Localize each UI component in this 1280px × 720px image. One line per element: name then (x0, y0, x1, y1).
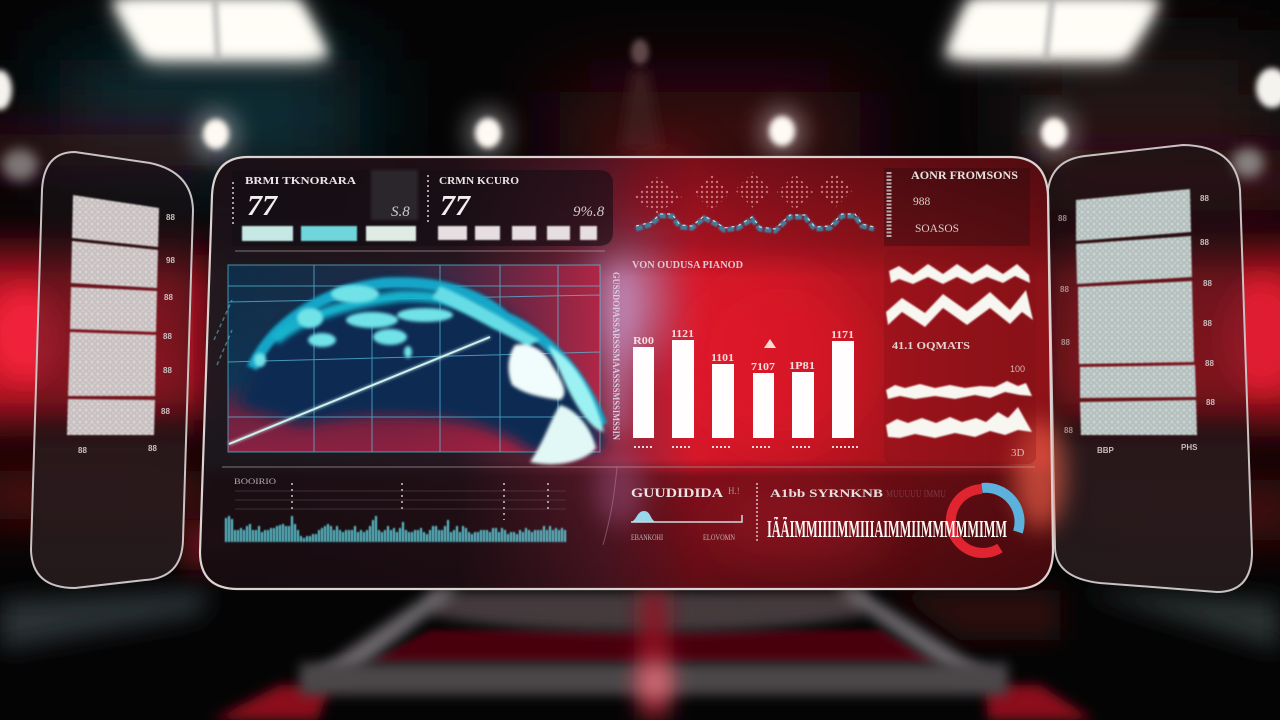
stacked bar blocks: left (67, 195, 159, 435)
zigzag charts (884, 250, 1036, 464)
bar value labels: 1P81 (789, 361, 815, 372)
dotted pattern strip (633, 172, 874, 231)
zigzag 4 (886, 407, 1032, 438)
right axis labels: PHS (1181, 443, 1198, 452)
trajectory line (229, 337, 490, 444)
mini chart: bottom centre (603, 467, 757, 545)
zigzag 1 (889, 264, 1030, 284)
right axis labels: BBP (1097, 446, 1115, 455)
right axis labels: 88 (1064, 426, 1073, 435)
panel: right side screen (1048, 145, 1252, 592)
summary label: SOASOS (915, 223, 959, 235)
bar value labels: R00 (633, 336, 654, 347)
right axis labels: 88 (1205, 359, 1214, 368)
left axis labels: 88 (163, 332, 172, 341)
bar value labels (633, 329, 854, 373)
bar chart heading: VON OUDUSA PIANOD (632, 260, 743, 271)
left axis labels: 88 (161, 407, 170, 416)
spectrum heading: BOOIRIO (234, 477, 276, 486)
bar chart (632, 260, 860, 447)
bar value labels: 1121 (671, 329, 694, 340)
zigzag 3 (886, 381, 1032, 399)
corner value: 3D (1011, 447, 1024, 459)
summary value: 988 (913, 196, 930, 208)
bars (633, 340, 854, 438)
top-right summary card (884, 168, 1030, 246)
panel: left side screen (31, 152, 193, 588)
right axis labels: 88 (1203, 279, 1212, 288)
mini chart: bottom centre: H.! (728, 486, 740, 496)
right axis labels: 88 (1060, 285, 1069, 294)
mini chart labels: EBANKOHI (631, 532, 663, 542)
right axis labels: 88 (1200, 194, 1209, 203)
mini chart area (631, 511, 742, 522)
stats condensed value row: IÃÃIMMIIIIMMIIIAIMMIIMMMMMIMM (767, 517, 1007, 543)
top-left stat cards (232, 170, 613, 246)
small value: 100 (1010, 364, 1025, 374)
left axis labels: 88 (164, 293, 173, 302)
marker triangle (764, 339, 776, 348)
left axis labels (78, 213, 175, 455)
ring gauge and stats (767, 488, 1020, 553)
mini chart heading: GUUDIDIDA (631, 485, 724, 500)
right axis labels: 88 (1061, 338, 1070, 347)
cyan signal line (636, 216, 874, 231)
left axis labels: 88 (78, 446, 87, 455)
right axis labels: 88 (1200, 238, 1209, 247)
card 1 small value: S.8 (391, 204, 410, 220)
ceiling lights (112, 0, 328, 60)
map grid (228, 265, 600, 452)
right axis labels (1058, 194, 1215, 455)
globe continents (252, 283, 604, 464)
stacked bar blocks: right (1076, 189, 1197, 435)
right axis labels: 88 (1206, 398, 1215, 407)
mini chart: bottom centre: ELOVOMN (703, 532, 735, 542)
spectrum bars (226, 516, 565, 542)
panel: main dashboard (200, 155, 1066, 589)
card 2 small value: 9%.8 (573, 204, 605, 220)
ring gauge and stats: MUUUUU IMMU (886, 488, 946, 500)
zigzag 2 (886, 290, 1033, 327)
vertical data column: GUSSDOPASSARSSSMAASSSSMSSIMSSIN (611, 272, 621, 440)
stats heading: A1bb SYRNKNB (770, 488, 883, 500)
bar axis ticks (634, 446, 860, 448)
bar value labels: 1101 (711, 353, 734, 364)
card 1 chips (242, 226, 416, 241)
left axis labels: 88 (163, 366, 172, 375)
ring gauge (951, 488, 1020, 553)
left axis labels: 88 (166, 213, 175, 222)
summary heading: AONR FROMSONS (911, 168, 1018, 182)
floor (0, 590, 210, 650)
right axis labels: 88 (1203, 319, 1212, 328)
card 1 heading: BRMI TKNORARA (245, 175, 356, 187)
card 2 heading: CRMN KCURO (439, 175, 519, 187)
left axis labels: 98 (166, 256, 175, 265)
bar value labels: 1171 (831, 330, 854, 341)
globe map (214, 265, 605, 464)
card 2 value: 77 (440, 190, 472, 222)
mid label: 41.1 OQMATS (892, 341, 971, 352)
bar value labels: 7107 (751, 362, 775, 373)
card 2 chips (438, 226, 597, 240)
left axis labels: 88 (148, 444, 157, 453)
spectrum chart (226, 477, 566, 542)
right axis labels: 88 (1058, 214, 1067, 223)
card 1 value: 77 (247, 190, 279, 222)
